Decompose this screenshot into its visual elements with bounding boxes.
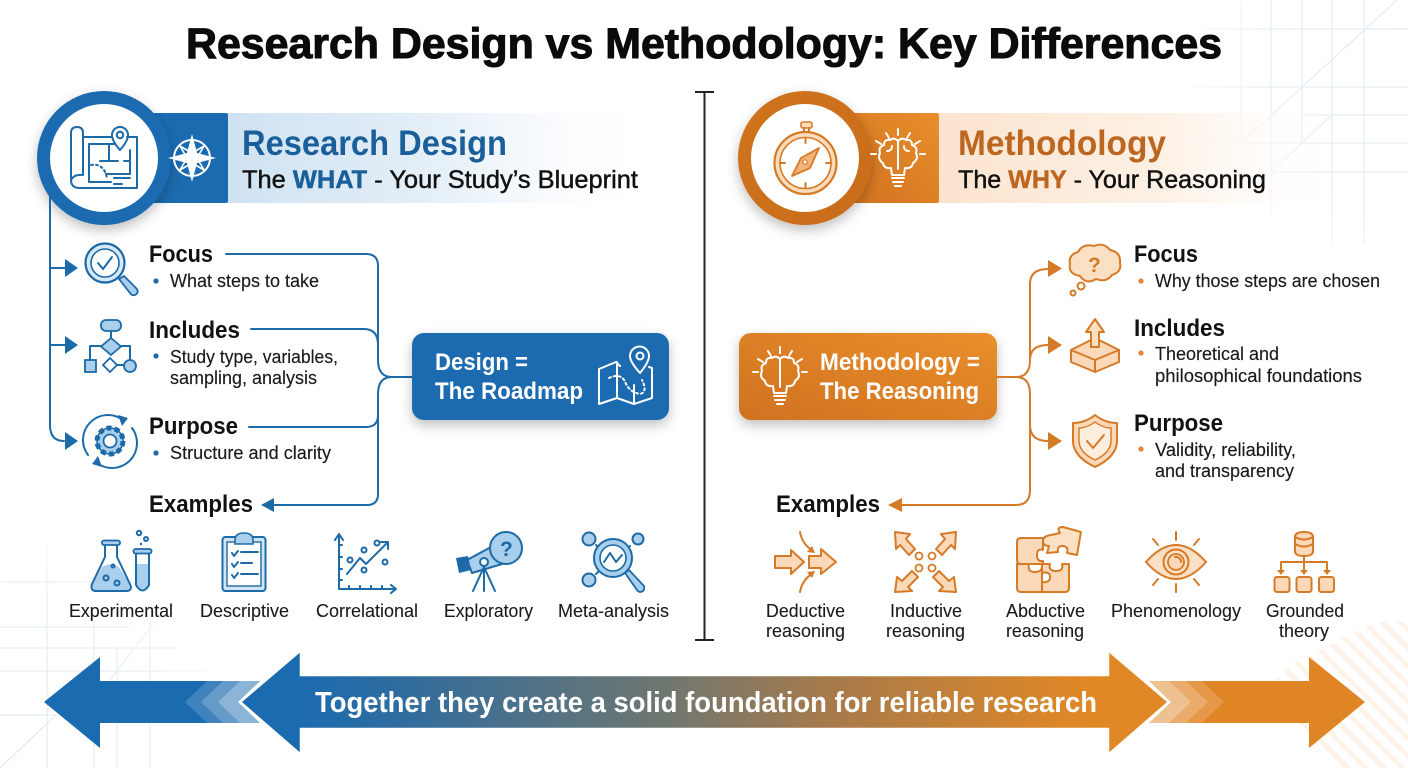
examples heading: Examples bbox=[149, 491, 253, 518]
examples: research design bbox=[69, 531, 669, 621]
focus text: Focus bbox=[1134, 241, 1198, 268]
label: Experimental bbox=[69, 601, 173, 621]
focus text: Why those steps are chosen bbox=[1155, 270, 1380, 291]
background grid: top right bbox=[1175, 0, 1408, 245]
includes text: sampling, analysis bbox=[170, 367, 317, 388]
includes text bbox=[149, 317, 338, 388]
icon: flowchart bbox=[85, 320, 136, 372]
heading: methodology: Methodology bbox=[958, 124, 1167, 163]
example: abductive reasoning: reasoning bbox=[1006, 621, 1084, 641]
center divider bbox=[695, 92, 714, 640]
callout: design roadmap bbox=[412, 333, 669, 420]
example: descriptive bbox=[200, 533, 289, 621]
purpose text: Structure and clarity bbox=[170, 442, 332, 463]
example: deductive reasoning: reasoning bbox=[766, 621, 845, 641]
includes text: Study type, variables, bbox=[170, 346, 338, 367]
label: Meta-analysis bbox=[558, 601, 669, 621]
focus text: Focus bbox=[149, 241, 213, 268]
purpose text: Purpose bbox=[1134, 410, 1223, 437]
label: Inductive bbox=[890, 601, 962, 621]
example: inductive reasoning: reasoning bbox=[886, 621, 965, 641]
purpose text bbox=[1134, 410, 1296, 481]
arrow: central gradient banner bbox=[240, 650, 1169, 755]
background grid: bottom left bbox=[0, 540, 207, 768]
purpose text: and transparency bbox=[1155, 460, 1295, 481]
icon: question cloud: ? bbox=[1088, 254, 1101, 277]
example: grounded theory: theory bbox=[1279, 621, 1329, 641]
connectors from methodology box bbox=[888, 260, 1062, 512]
title: Research Design vs Methodology: Key Differences bbox=[186, 20, 1222, 68]
examples heading: Examples bbox=[776, 491, 880, 518]
subheading: the what: The WHAT - Your Study’s Blueprint bbox=[242, 166, 638, 194]
label: Correlational bbox=[316, 601, 418, 621]
icon badge ring bbox=[738, 91, 872, 225]
example: experimental bbox=[69, 531, 173, 621]
includes text: Includes bbox=[149, 317, 240, 344]
header: research design bbox=[37, 91, 660, 225]
label: Grounded bbox=[1266, 601, 1344, 621]
panel: methodology bbox=[738, 91, 1380, 641]
header gradient band bbox=[939, 113, 1349, 203]
header gradient band bbox=[228, 113, 660, 203]
icon: gear cycle bbox=[83, 415, 137, 468]
connectors to design box bbox=[226, 254, 412, 512]
background hatch: bottom right bbox=[1275, 622, 1408, 768]
icon: question cloud bbox=[1070, 245, 1120, 296]
label: Descriptive bbox=[200, 601, 289, 621]
icon badge ring bbox=[37, 91, 171, 225]
label: Abductive bbox=[1006, 601, 1085, 621]
arrow: right orange bbox=[1149, 657, 1365, 748]
icon: box with arrow bbox=[1071, 319, 1119, 372]
icon: brain bulb bbox=[753, 347, 807, 404]
label: Exploratory bbox=[444, 601, 533, 621]
panel: research design bbox=[37, 91, 669, 621]
example: meta-analysis bbox=[558, 532, 669, 621]
icon: compass rose bbox=[168, 134, 216, 182]
focus text bbox=[149, 241, 319, 291]
header dark tab bbox=[150, 113, 228, 203]
callout text: Methodology = bbox=[820, 349, 980, 376]
focus text: What steps to take bbox=[170, 270, 319, 291]
includes text bbox=[1134, 315, 1362, 386]
includes text: Includes bbox=[1134, 315, 1225, 342]
bottom banner arrows bbox=[44, 650, 1365, 755]
header dark tab bbox=[850, 113, 939, 203]
icon: magnifier check bbox=[86, 244, 138, 295]
example: abductive reasoning bbox=[1006, 527, 1085, 641]
includes text: philosophical foundations bbox=[1155, 365, 1362, 386]
focus text bbox=[1134, 241, 1380, 291]
left arrows bbox=[50, 196, 78, 450]
icon: stopwatch compass bbox=[751, 104, 859, 212]
purpose text: Purpose bbox=[149, 413, 238, 440]
example: phenomenology bbox=[1111, 532, 1241, 621]
icon: map with pin bbox=[599, 347, 652, 404]
label: Phenomenology bbox=[1111, 601, 1241, 621]
heading: research design: Research Design bbox=[242, 124, 507, 163]
example: deductive reasoning bbox=[766, 532, 845, 641]
example: exploratory bbox=[444, 532, 533, 621]
example: grounded theory bbox=[1266, 532, 1344, 641]
example: correlational bbox=[316, 534, 418, 621]
arrow: left blue bbox=[44, 657, 260, 748]
example: exploratory: ? bbox=[500, 538, 513, 561]
banner text: Together they create a solid foundation for reliable research bbox=[315, 687, 1097, 719]
callout: design roadmap: The Roadmap bbox=[435, 378, 583, 405]
icon: shield check bbox=[1073, 415, 1117, 467]
purpose text bbox=[149, 413, 332, 463]
icon: brain bulb bbox=[871, 129, 925, 186]
callout text: Design = bbox=[435, 349, 528, 376]
example: inductive reasoning bbox=[886, 532, 965, 641]
examples: methodology bbox=[766, 527, 1344, 641]
subheading: the why: The WHY - Your Reasoning bbox=[958, 166, 1266, 194]
header: methodology bbox=[738, 91, 1349, 225]
icon: blueprint bbox=[50, 104, 158, 212]
includes text: Theoretical and bbox=[1155, 343, 1279, 364]
purpose text: Validity, reliability, bbox=[1155, 439, 1296, 460]
callout: methodology reasoning: The Reasoning bbox=[820, 378, 979, 405]
label: Deductive bbox=[766, 601, 845, 621]
callout: methodology reasoning bbox=[739, 333, 997, 420]
